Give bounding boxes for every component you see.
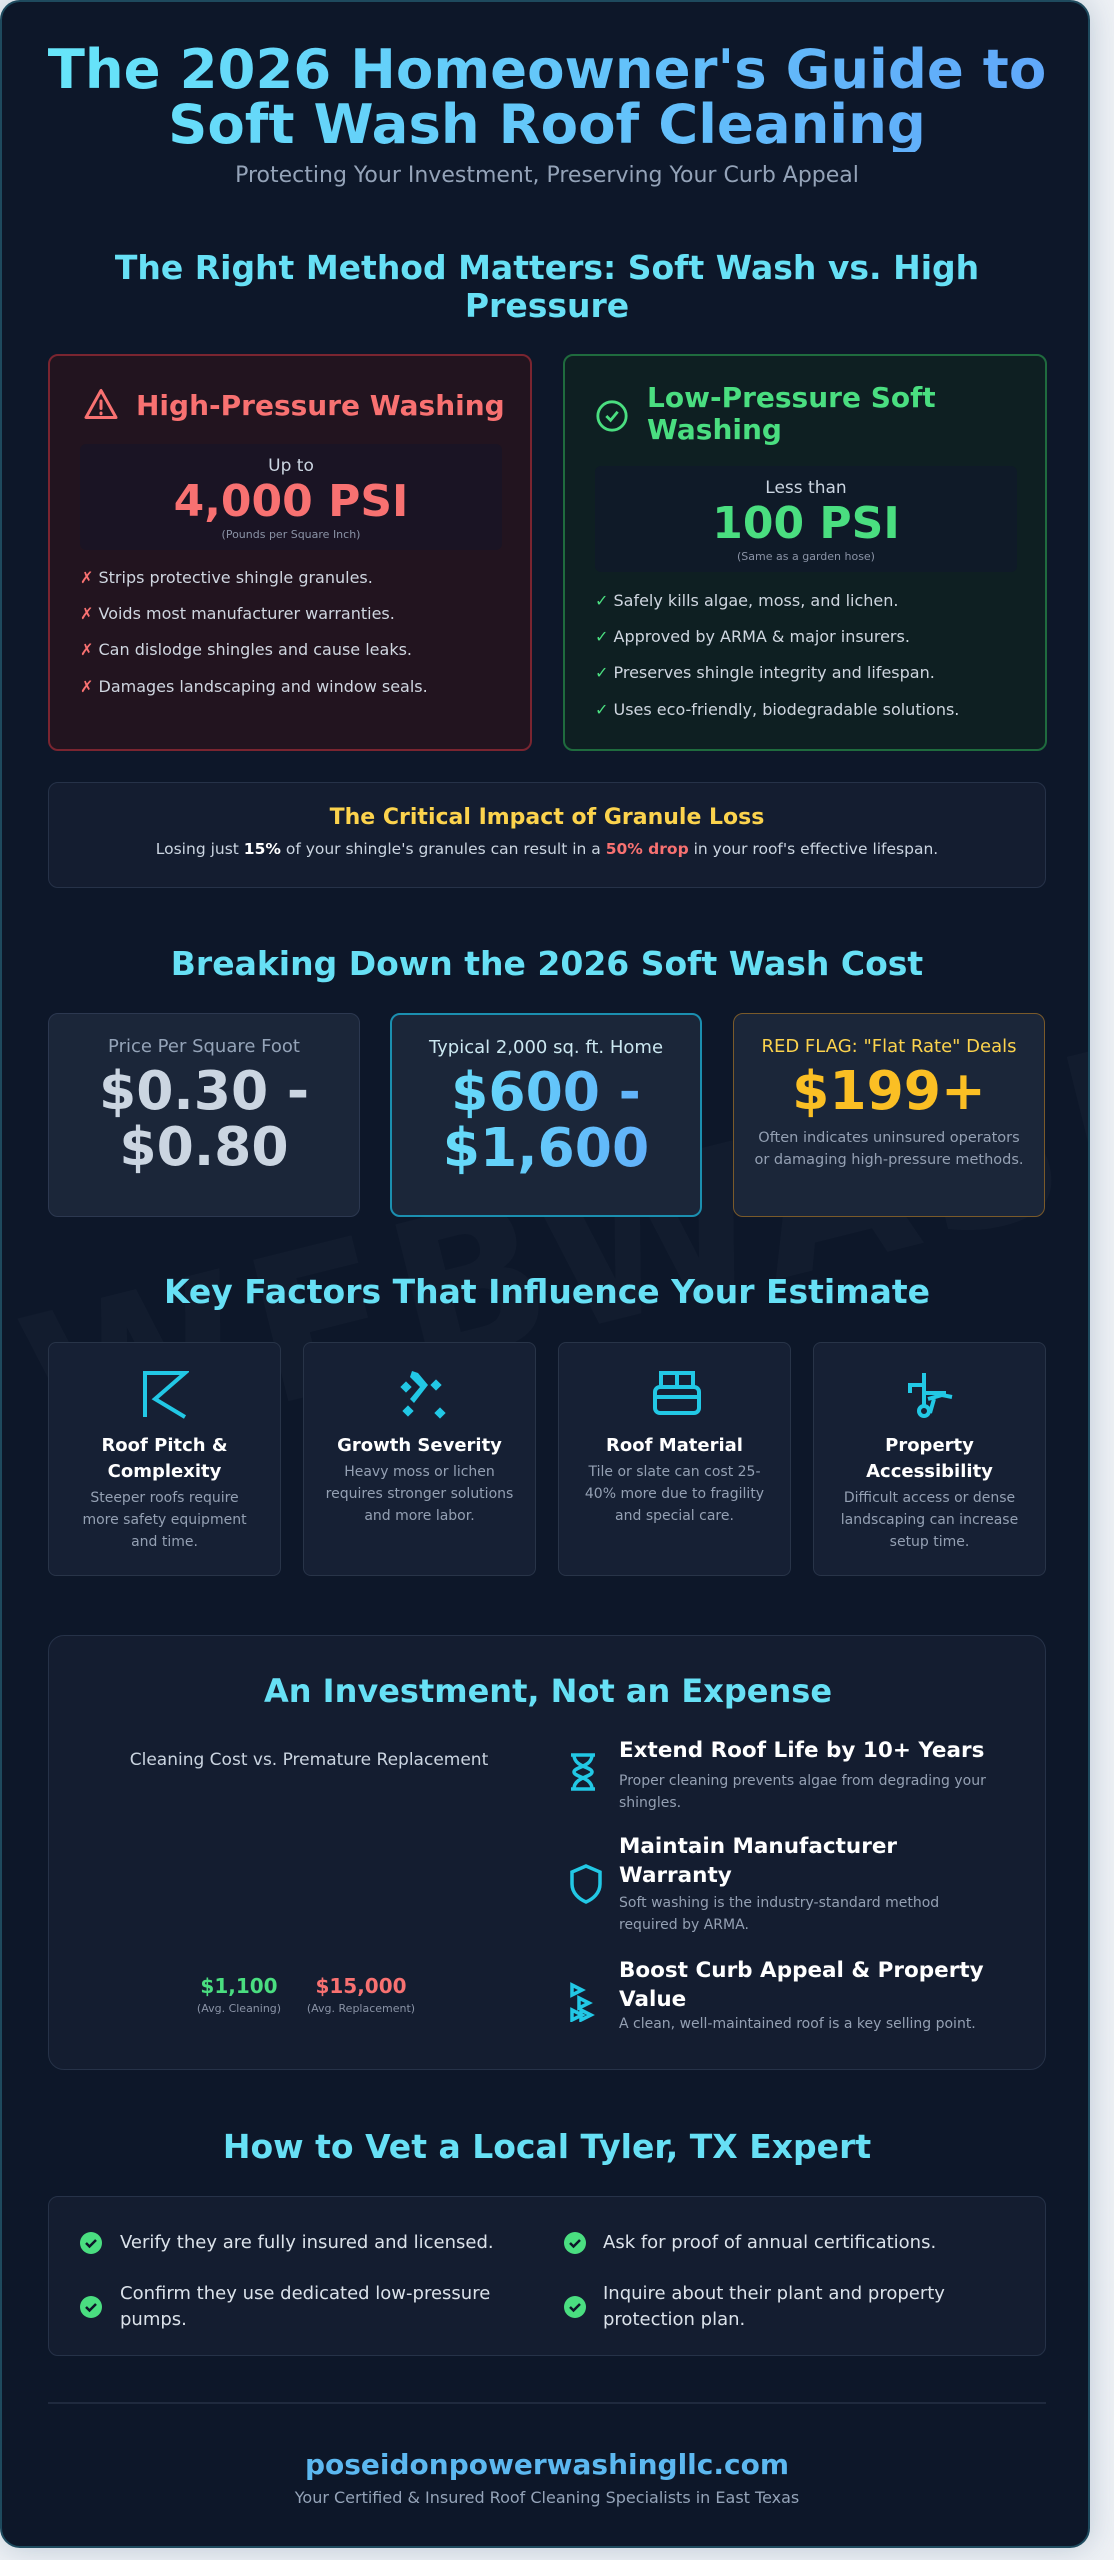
chart: cost comparison: Cleaning Cost vs. Premature Replacement [130,1750,488,1770]
psi box: 4,000 PSI [174,476,408,527]
heading: method: Pressure [465,286,629,325]
factor: access: Difficult access or dense landscaping can increase setup time. [841,1490,1018,1550]
psi box [80,444,502,550]
list: ✗ Can dislodge shingles and cause leaks. [80,640,412,659]
factor: access: Accessibility [866,1461,993,1482]
list [595,591,959,719]
list: ✓ Uses eco-friendly, biodegradable solutions. [595,700,959,719]
heading: An Investment, Not an Expense [264,1672,832,1710]
panel title: High-Pressure Washing [136,389,505,422]
factor: material: Tile or slate can cost 25-40% more due to fragility and special care. [585,1464,764,1524]
panel: vet checklist [48,2196,1046,2356]
cost card: red flag: Often indicates uninsured operators or damaging high-pressure methods. [754,1130,1024,1168]
heading: vet: How to Vet a Local Tyler, TX Expert [223,2127,871,2166]
factor: roof pitch: Roof Pitch & [101,1435,228,1456]
cost card: per sq ft: $0.80 [119,1115,289,1178]
cost card: typical home: Typical 2,000 sq. ft. Home [429,1037,663,1058]
factor: access [813,1342,1046,1576]
benefit: curb appeal: Boost Curb Appeal & Property [619,1958,984,1983]
panel: investment [48,1635,1046,2070]
chart: cost comparison: $15,000 [315,1974,407,1998]
list: ✗ Strips protective shingle granules. [80,568,373,587]
item: Ask for proof of annual certifications. [603,2232,936,2253]
list [80,568,428,696]
psi box: (Same as a garden hose) [737,550,875,563]
panel: soft wash [563,354,1047,751]
title: The 2026 Homeowner's Guide to [48,37,1046,101]
chart: cost comparison [130,1750,488,2015]
benefit: warranty: Maintain Manufacturer [619,1834,897,1859]
subtitle: Protecting Your Investment, Preserving Your Curb Appeal [235,163,859,188]
psi box: 100 PSI [712,498,900,549]
item: Inquire about their plant and property protection plan. [603,2283,945,2330]
benefit: roof life: Extend Roof Life by 10+ Years [619,1738,984,1763]
cost card: typical home: $600 - [451,1060,641,1123]
panel title: Washing [647,413,782,446]
title: Soft Wash Roof Cleaning [168,92,926,156]
benefit: roof life: Proper cleaning prevents algae from degrading your shingles. [619,1773,986,1811]
footer tagline: Your Certified & Insured Roof Cleaning Specialists in East Texas [295,2488,799,2507]
list: ✗ Damages landscaping and window seals. [80,677,428,696]
cost card: red flag: $199+ [792,1059,986,1122]
list: ✓ Approved by ARMA & major insurers. [595,627,910,646]
callout: granule loss [48,782,1046,888]
factor: material: Roof Material [606,1435,743,1456]
factor: growth [303,1342,536,1576]
factor: growth: Heavy moss or lichen requires stronger solutions and more labor. [326,1464,513,1524]
cost card: per sq ft [48,1013,360,1217]
psi box [595,466,1017,572]
icon: growth [400,1371,446,1418]
chart: cost comparison: $1,100 [200,1974,278,1998]
callout: granule loss: Losing just 15% of your shingle's granules can result in a 50% drop in your roof's effective lifespan. [156,840,938,858]
icon: warning [84,388,118,419]
psi box: Less than [765,478,847,498]
benefit: curb appeal: A clean, well-maintained roof is a key selling point. [619,2016,976,2032]
benefit: roof life [571,1738,986,1811]
chart: cost comparison: (Avg. Cleaning) [197,2002,281,2015]
title [2,42,1092,152]
footer url: poseidonpowerwashingllc.com [305,2448,789,2481]
factor: roof pitch: Steeper roofs require more safety equipment and time. [82,1490,247,1550]
panel title: Low-Pressure Soft [647,381,936,414]
icon: access [908,1373,952,1418]
heading: method: The Right Method Matters: Soft Wash vs. High [115,248,979,287]
list: ✓ Safely kills algae, moss, and lichen. [595,591,898,610]
cost card: per sq ft: $0.30 - [99,1059,309,1122]
cost card: per sq ft: Price Per Square Foot [108,1036,300,1057]
benefit: warranty: Soft washing is the industry-standard method required by ARMA. [619,1895,939,1933]
cost card: red flag: RED FLAG: "Flat Rate" Deals [761,1036,1017,1057]
icon: material [653,1371,701,1415]
benefit: warranty [570,1834,939,1933]
heading: cost: Breaking Down the 2026 Soft Wash Cost [171,944,923,983]
list: ✗ Voids most manufacturer warranties. [80,604,395,623]
panel: high pressure [48,354,532,751]
cost card: red flag [733,1013,1045,1217]
icon: pitch [143,1371,189,1419]
cost card: typical home [390,1013,702,1217]
factor: roof pitch: Complexity [108,1461,221,1482]
factor: growth: Growth Severity [337,1435,502,1456]
benefit: warranty: Warranty [619,1863,732,1888]
callout: granule loss: The Critical Impact of Granule Loss [330,805,764,830]
benefit: curb appeal: Value [619,1987,686,2012]
panel title [647,381,936,446]
icon: check circle [596,400,628,432]
heading: method [115,248,979,325]
item: Confirm they use dedicated low-pressure pumps. [120,2283,490,2330]
heading: factors: Key Factors That Influence Your Estimate [164,1272,930,1311]
cost card: typical home: $1,600 [443,1116,649,1179]
psi box: (Pounds per Square Inch) [222,528,360,541]
chart: cost comparison: (Avg. Replacement) [307,2002,415,2015]
factor: material [558,1342,791,1576]
item: Verify they are fully insured and licensed. [120,2232,494,2253]
psi box: Up to [268,456,314,476]
factor: roof pitch [48,1342,281,1576]
list: ✓ Preserves shingle integrity and lifespan. [595,663,935,682]
factor: access: Property [885,1435,974,1456]
benefit: curb appeal [570,1958,984,2032]
